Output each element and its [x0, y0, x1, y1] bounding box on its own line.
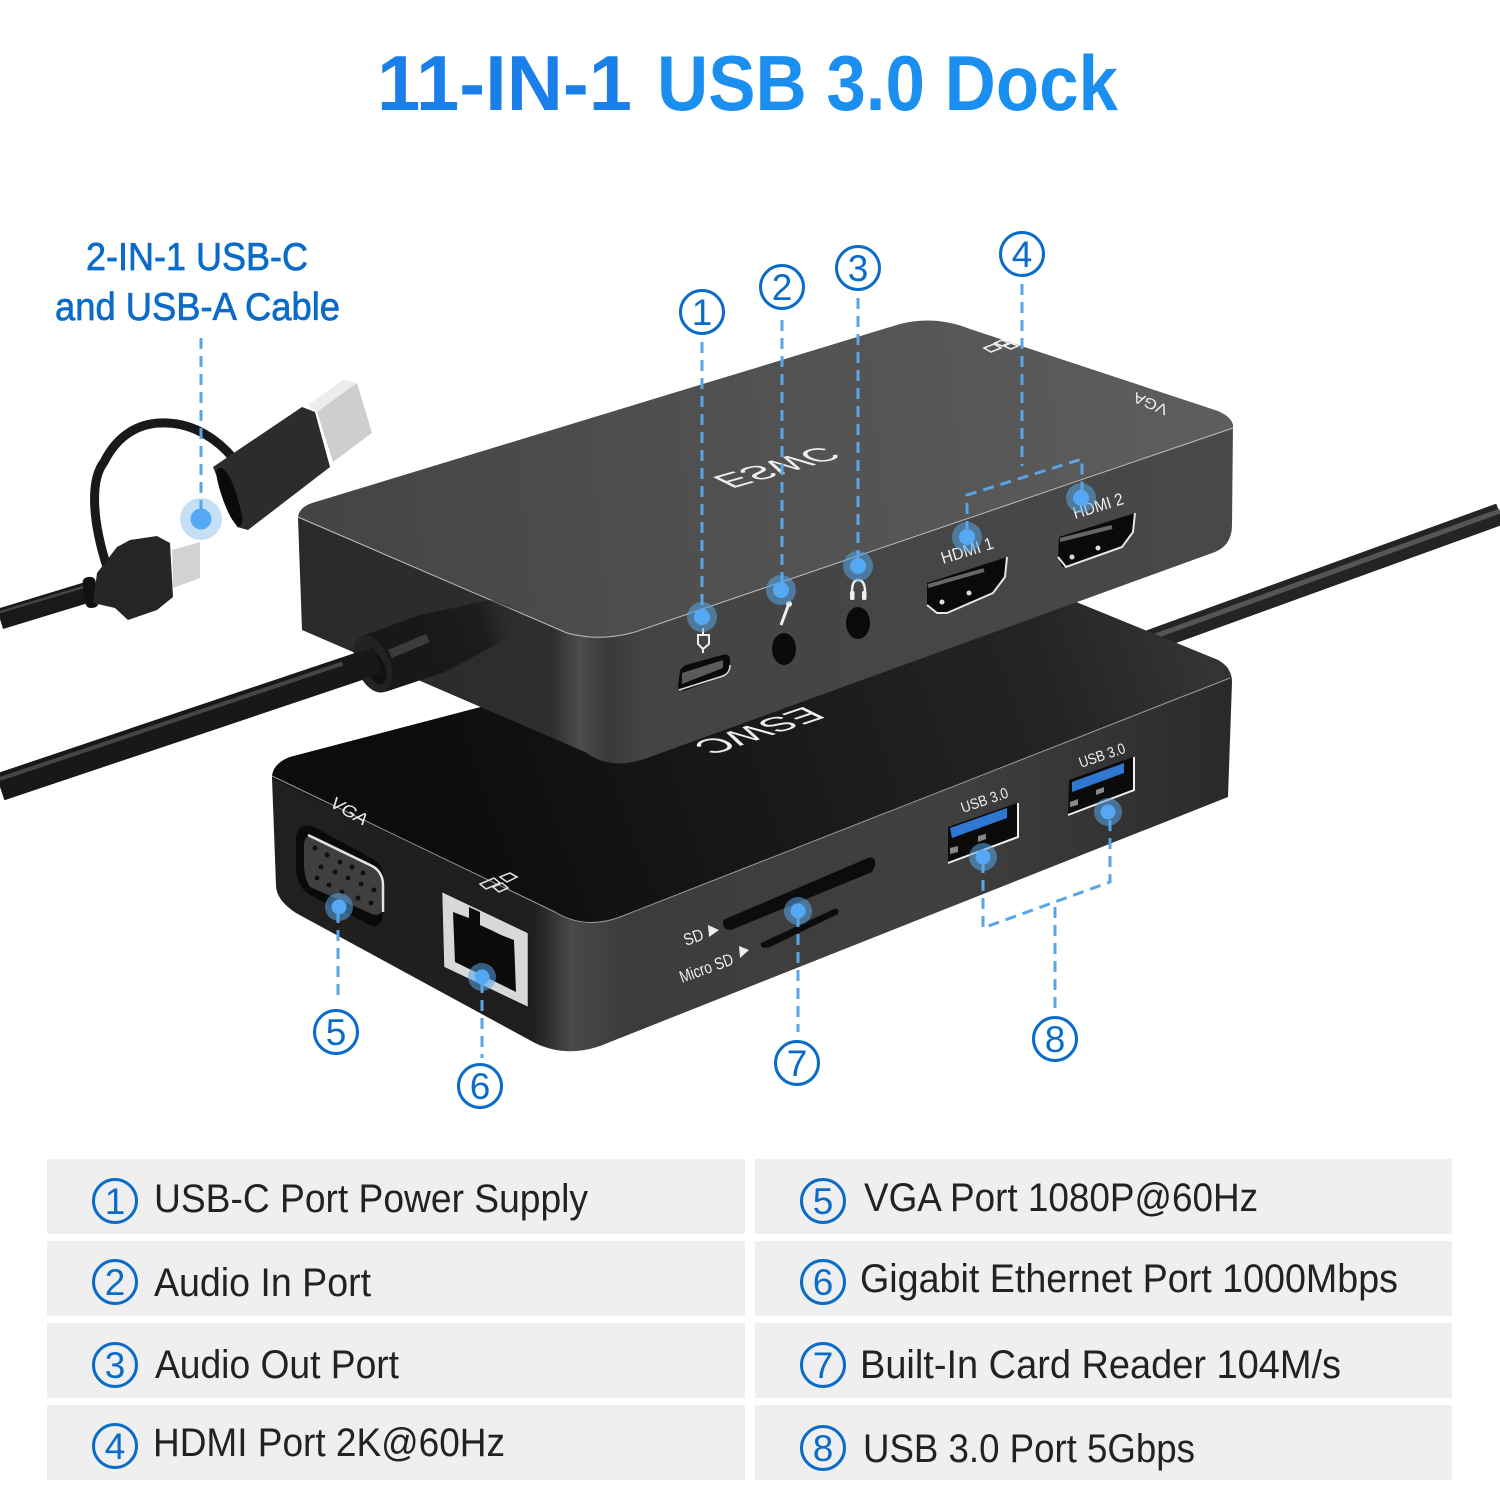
callout 3: 3	[848, 248, 868, 289]
callout 8	[969, 798, 1122, 1060]
SD card slots: Micro SD	[677, 950, 736, 987]
audio out jack	[846, 580, 870, 639]
legend row 8: USB 3.0 Port 5Gbps	[863, 1427, 1195, 1471]
legend row 1: 1	[105, 1181, 125, 1222]
callout 4	[952, 232, 1096, 552]
callout: cable	[180, 338, 222, 540]
HDMI 1 port: HDMI 1	[939, 534, 996, 568]
legend row 7: Built-In Card Reader 104M/s	[860, 1343, 1341, 1387]
upper dock	[0, 320, 1233, 787]
callout 2: 2	[772, 267, 792, 308]
Ethernet port	[442, 873, 528, 1007]
HDMI 2 port	[1058, 489, 1135, 567]
callout 6	[458, 963, 502, 1108]
legend row 2: Audio In Port	[154, 1261, 371, 1305]
legend row 4	[47, 1405, 745, 1480]
SD card slots	[677, 858, 875, 987]
title: USB 3.0 Dock	[657, 39, 1119, 127]
legend row 3	[47, 1323, 745, 1398]
upper dock VGA mark: VGA	[1131, 388, 1171, 418]
2-in-1 cable illustration	[0, 380, 372, 620]
callout 6: 6	[470, 1066, 490, 1107]
USB 3.0 ports: USB 3.0	[959, 785, 1011, 817]
legend row 5: 5	[813, 1181, 833, 1222]
legend row 6	[755, 1241, 1452, 1316]
callout 5: 5	[326, 1012, 346, 1053]
lower dock logo: ESWC	[683, 702, 834, 758]
rear cable of the dock	[1050, 511, 1500, 677]
callout 5	[314, 893, 358, 1054]
callout 3	[836, 246, 880, 581]
legend row 7	[755, 1323, 1452, 1398]
callout 8: 8	[1045, 1019, 1065, 1060]
cable label	[55, 236, 340, 329]
legend row 3: 3	[105, 1345, 125, 1386]
SD card slots: SD	[681, 925, 706, 950]
upper dock logo: ESWC	[702, 442, 849, 492]
callout 2	[760, 266, 804, 605]
legend row 7: 7	[813, 1345, 833, 1386]
USB 3.0 ports: USB 3.0	[1077, 740, 1128, 772]
legend row 2: 2	[105, 1262, 125, 1303]
VGA port: VGA	[327, 793, 371, 829]
cable label: and USB-A Cable	[55, 286, 340, 329]
title	[377, 39, 1119, 127]
legend row 6: 6	[813, 1262, 833, 1303]
VGA port	[296, 793, 384, 926]
legend row 4: 4	[105, 1426, 125, 1467]
upper dock top face	[298, 320, 1233, 637]
HDMI 2 port: HDMI 2	[1071, 489, 1126, 523]
cable and strain relief	[0, 600, 525, 787]
legend row 3: Audio Out Port	[155, 1343, 399, 1387]
upper dock body	[298, 345, 1233, 763]
title: 11-IN-1	[377, 39, 632, 127]
callout 7	[776, 897, 818, 1084]
cable label: 2-IN-1 USB-C	[86, 236, 308, 279]
callout 1	[680, 290, 724, 632]
lower dock top face	[272, 571, 1230, 922]
legend row 5: VGA Port 1080P@60Hz	[864, 1176, 1258, 1220]
legend row 8: 8	[813, 1428, 833, 1469]
legend row 2	[47, 1241, 745, 1316]
legend row 8	[755, 1405, 1452, 1480]
legend row 1: USB-C Port Power Supply	[154, 1177, 588, 1221]
legend row 1	[47, 1159, 745, 1234]
HDMI 1 port	[927, 534, 1007, 613]
lower dock body	[272, 571, 1232, 1051]
legend row 6: Gigabit Ethernet Port 1000Mbps	[860, 1257, 1398, 1301]
lower dock	[272, 571, 1232, 1051]
USB-C port	[678, 628, 730, 690]
upper dock network mark	[984, 340, 1018, 352]
callout 1: 1	[692, 292, 712, 333]
legend row 5	[755, 1159, 1452, 1234]
USB 3.0 ports	[948, 740, 1134, 863]
audio in jack	[772, 601, 796, 665]
legend row 4: HDMI Port 2K@60Hz	[153, 1421, 505, 1465]
callout 4: 4	[1012, 234, 1032, 275]
callout 7: 7	[787, 1043, 807, 1084]
